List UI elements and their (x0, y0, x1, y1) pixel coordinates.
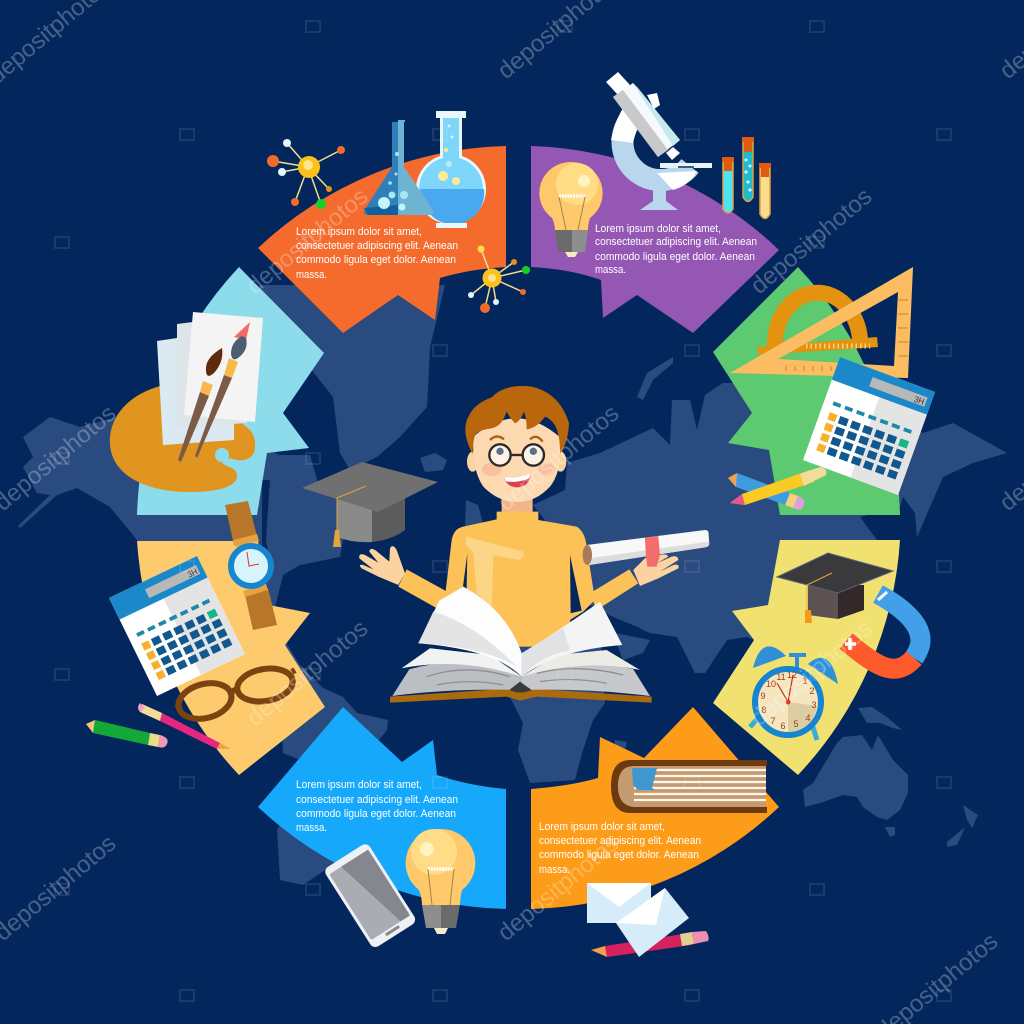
panel: cyan left (137, 267, 324, 515)
icon: calculator right: 3H (913, 394, 926, 407)
icon: alarm clock: 5 (793, 719, 799, 729)
text: blue panel: consectetuer adipiscing elit. Aenean (296, 794, 458, 806)
loose pages left (402, 648, 522, 677)
text: orange bottom panel: massa. (539, 864, 570, 876)
icon: alarm clock: 11 (776, 672, 786, 682)
glasses and eyes (489, 436, 544, 466)
loose pages right (522, 650, 640, 677)
map water channels (262, 480, 650, 640)
icon: calculator left: 3H (186, 567, 199, 580)
text: purple panel (595, 223, 757, 276)
shaded right page (522, 628, 570, 677)
text: orange panel: massa. (296, 269, 327, 281)
text: purple panel: Lorem ipsum dolor sit amet, (595, 223, 721, 235)
watermarks: depositphotos (242, 183, 373, 300)
icon: alarm clock: 10 (766, 679, 776, 689)
icon: alarm clock: 3 (811, 700, 817, 710)
icon: light bulb in blue panel (406, 829, 475, 934)
icon: test tubes (722, 137, 771, 218)
text: blue panel: Lorem ipsum dolor sit amet, (296, 779, 422, 791)
icon: round flask (416, 111, 486, 228)
icon: magnet (845, 592, 920, 669)
icon: alarm clock: 1 (802, 676, 808, 686)
icon: thick book (611, 760, 767, 813)
icon: atom left (267, 139, 345, 209)
text: blue panel: massa. (296, 822, 327, 834)
icon: conical flask (364, 120, 434, 215)
text: orange panel: Lorem ipsum dolor sit amet, (296, 226, 422, 238)
panel: purple top-right (531, 146, 779, 333)
icon: calculator left (109, 556, 245, 696)
panel: yellow right (713, 540, 900, 775)
icon: envelope back (587, 883, 651, 923)
panel: blue bottom-left (258, 707, 506, 909)
open book (390, 587, 652, 703)
icon: alarm clock: 7 (770, 716, 776, 726)
lifted right page (522, 602, 622, 677)
text: orange panel (296, 226, 458, 281)
icon: protractor (757, 293, 878, 355)
icon: glasses (175, 664, 295, 724)
lifted left page (418, 587, 522, 677)
icon: blue pencil (728, 473, 805, 510)
watermarks: depositphotos (242, 615, 373, 732)
icon: calculator right (803, 357, 935, 495)
icon: pencil below envelopes (591, 931, 709, 957)
mouth (504, 473, 531, 487)
page block right (522, 663, 650, 696)
figure: boy with book and diploma (359, 386, 709, 703)
text: blue panel: commodo ligula eget dolor. Aenean (296, 808, 456, 820)
cheeks (482, 463, 555, 476)
icon: yellow pencil (730, 467, 826, 505)
spine (509, 682, 532, 692)
text: orange bottom panel: consectetuer adipiscing elit. Aenean (539, 835, 701, 847)
icon: microscope (606, 72, 712, 210)
icon: atom centre (468, 246, 530, 313)
watermarks: depositphotos (493, 830, 624, 947)
panel: orange top-left (258, 146, 506, 333)
icon: alarm clock: 9 (760, 691, 766, 701)
icon: green pencil left (86, 720, 168, 748)
icon: alarm clock: 12 (787, 670, 797, 680)
text: purple panel: consectetuer adipiscing elit. Aenean (595, 236, 757, 248)
icon: envelope front (616, 888, 689, 957)
text: orange bottom panel: commodo ligula eget dolor. Aenean (539, 849, 699, 861)
text: blue panel (296, 779, 458, 834)
icon: graduation cap left (302, 462, 438, 547)
page block left (392, 663, 522, 696)
text: purple panel: massa. (595, 264, 626, 276)
book cover (390, 679, 652, 703)
icon: graduation cap right (777, 553, 893, 623)
icon: alarm clock: 4 (805, 713, 811, 723)
panel: light orange left (137, 541, 325, 775)
neck (502, 497, 533, 520)
icon: wristwatch (225, 501, 277, 630)
icon: triangle ruler (730, 267, 913, 378)
icon: smartphone (323, 842, 417, 949)
icon: palette and brushes (110, 312, 263, 492)
sweater (398, 512, 638, 647)
left hand (359, 546, 405, 585)
icon: alarm clock (750, 646, 838, 740)
text: orange bottom panel (539, 821, 701, 876)
icon: light bulb in purple panel (539, 162, 603, 257)
text: orange bottom panel: Lorem ipsum dolor sit amet, (539, 821, 665, 833)
shaded left page (418, 612, 517, 667)
diploma (583, 530, 709, 567)
icon: pink pencil left (138, 703, 231, 749)
panel: green right (713, 267, 900, 515)
text: orange panel: consectetuer adipiscing elit. Aenean (296, 240, 458, 252)
text: purple panel: commodo ligula eget dolor. Aenean (595, 251, 755, 263)
text: orange panel: commodo ligula eget dolor. Aenean (296, 254, 456, 266)
watermarks: depositphotos (493, 400, 624, 517)
watermarks: depositphotos (746, 615, 877, 732)
hair (465, 386, 569, 454)
world map (18, 285, 1007, 885)
icon: alarm clock: 2 (809, 686, 815, 696)
right hand (633, 554, 679, 586)
face (473, 418, 560, 502)
page lines (427, 669, 623, 685)
watermarks: depositphotos (746, 183, 877, 300)
ears (467, 452, 566, 472)
icon: alarm clock: 8 (761, 705, 767, 715)
panel: orange bottom-right (531, 707, 779, 909)
icon: alarm clock: 6 (780, 721, 786, 731)
